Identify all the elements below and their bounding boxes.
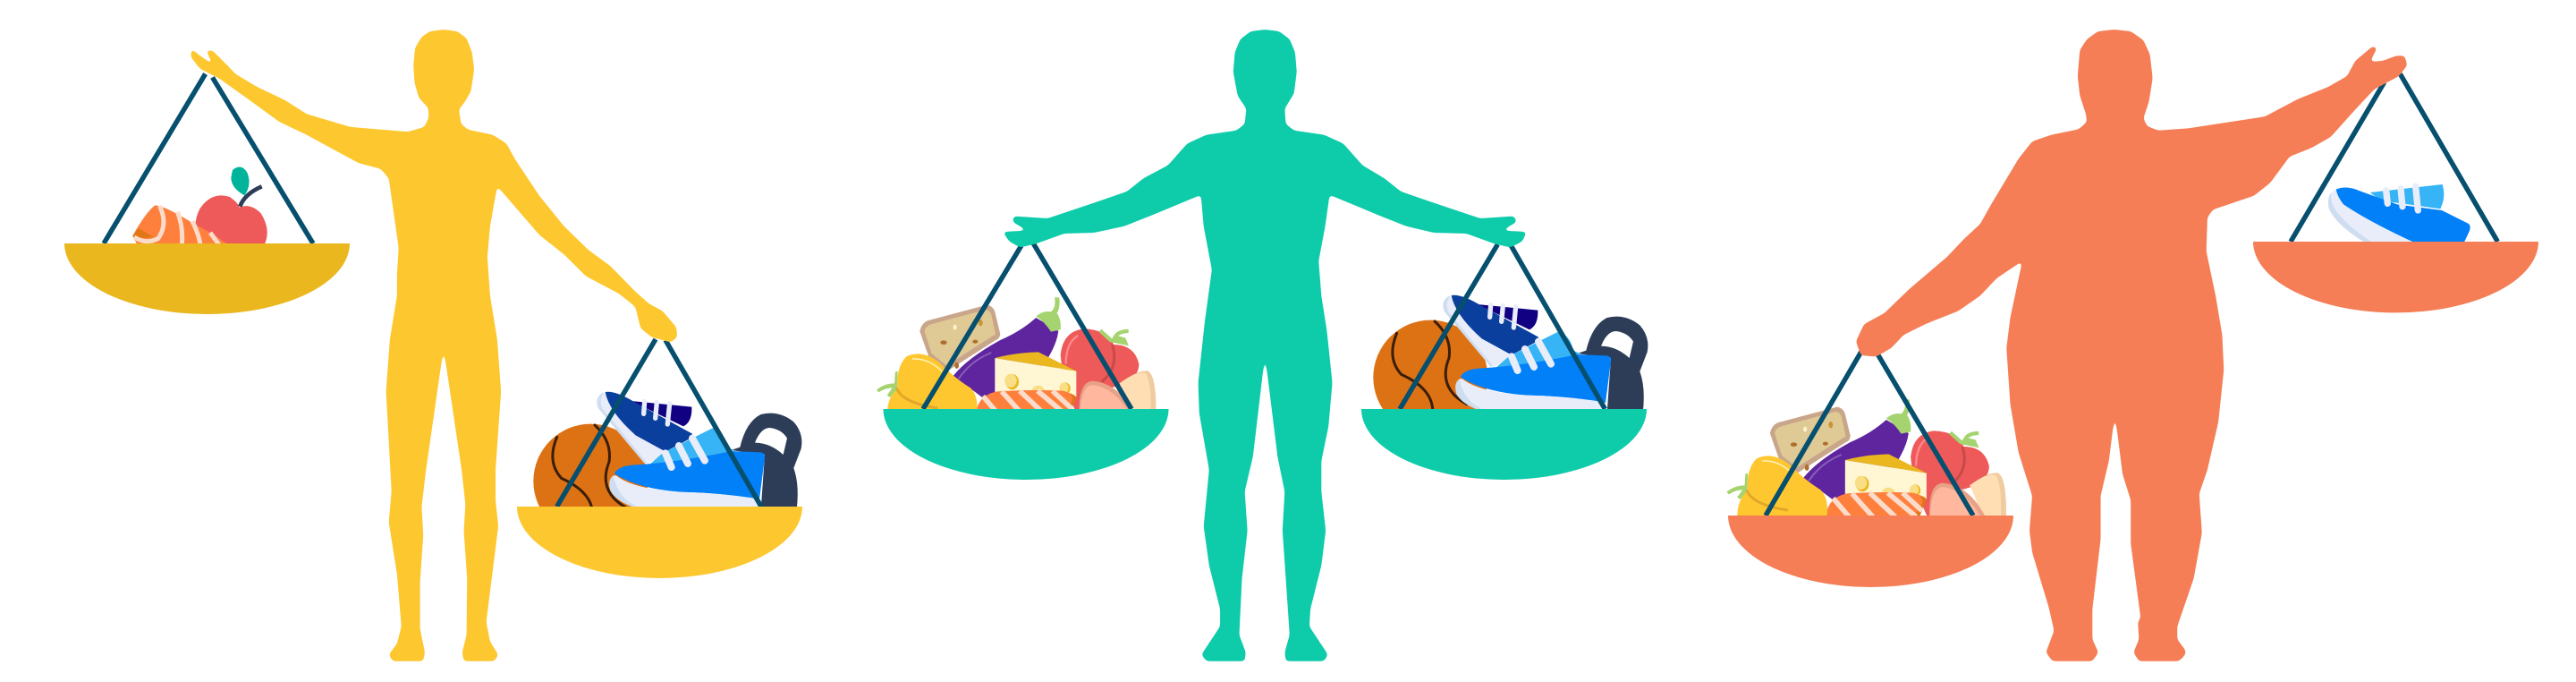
arrow: right pan strings — [1400, 244, 1605, 409]
icon: right pan — [517, 507, 802, 578]
arrow: right pan strings — [2291, 74, 2497, 242]
panel: orange figure, high intake and low activity — [1726, 30, 2538, 661]
icon: cheese wedge — [995, 352, 1076, 397]
icon: salmon and apple in raised pan — [132, 167, 267, 244]
icon: left pan — [64, 243, 350, 314]
icon: orange body silhouette — [1856, 30, 2407, 661]
icon: food pile in left pan — [877, 297, 1156, 416]
icon: sneakers and kettlebell in lowered pan — [597, 392, 801, 510]
icon: salmon sushi — [976, 390, 1076, 416]
icon: salmon sushi — [132, 205, 228, 244]
icon: right pan — [2253, 242, 2538, 312]
icon: eggplant — [953, 297, 1061, 400]
icon: right pan — [1361, 409, 1647, 480]
icon: dark blue sneaker — [1443, 295, 1538, 367]
arrow: left pan strings — [104, 74, 313, 243]
icon: bright blue sneaker — [1455, 331, 1611, 413]
icon: basketball in right pan — [1373, 320, 1487, 435]
panel: teal figure, balanced intake and activity — [877, 30, 1648, 661]
icon: apple — [195, 167, 267, 244]
icon: basketball in lowered pan — [533, 424, 648, 539]
icon: yellow body silhouette — [191, 30, 677, 661]
icon: yellow pepper — [877, 354, 977, 416]
icon: beige potato — [1120, 371, 1156, 416]
icon: left pan — [884, 409, 1168, 480]
icon: teal body silhouette — [1003, 30, 1527, 661]
panel: yellow figure, low intake and high activity — [64, 30, 802, 661]
icon: red pepper — [1061, 328, 1139, 416]
icon: sneakers and kettlebell in right pan — [1443, 295, 1648, 413]
arrow: right pan strings — [557, 339, 761, 507]
icon: kettlebell — [1577, 317, 1648, 413]
icon: peach potato — [1080, 381, 1136, 416]
icon: food pile in lowered pan — [1726, 399, 2006, 518]
arrow: left pan strings — [923, 243, 1131, 409]
icon: bread — [919, 305, 1000, 371]
icon: blue sneaker in raised pan — [2328, 184, 2470, 243]
icon: left pan — [1728, 516, 2013, 587]
arrow: left pan strings — [1766, 350, 1973, 516]
